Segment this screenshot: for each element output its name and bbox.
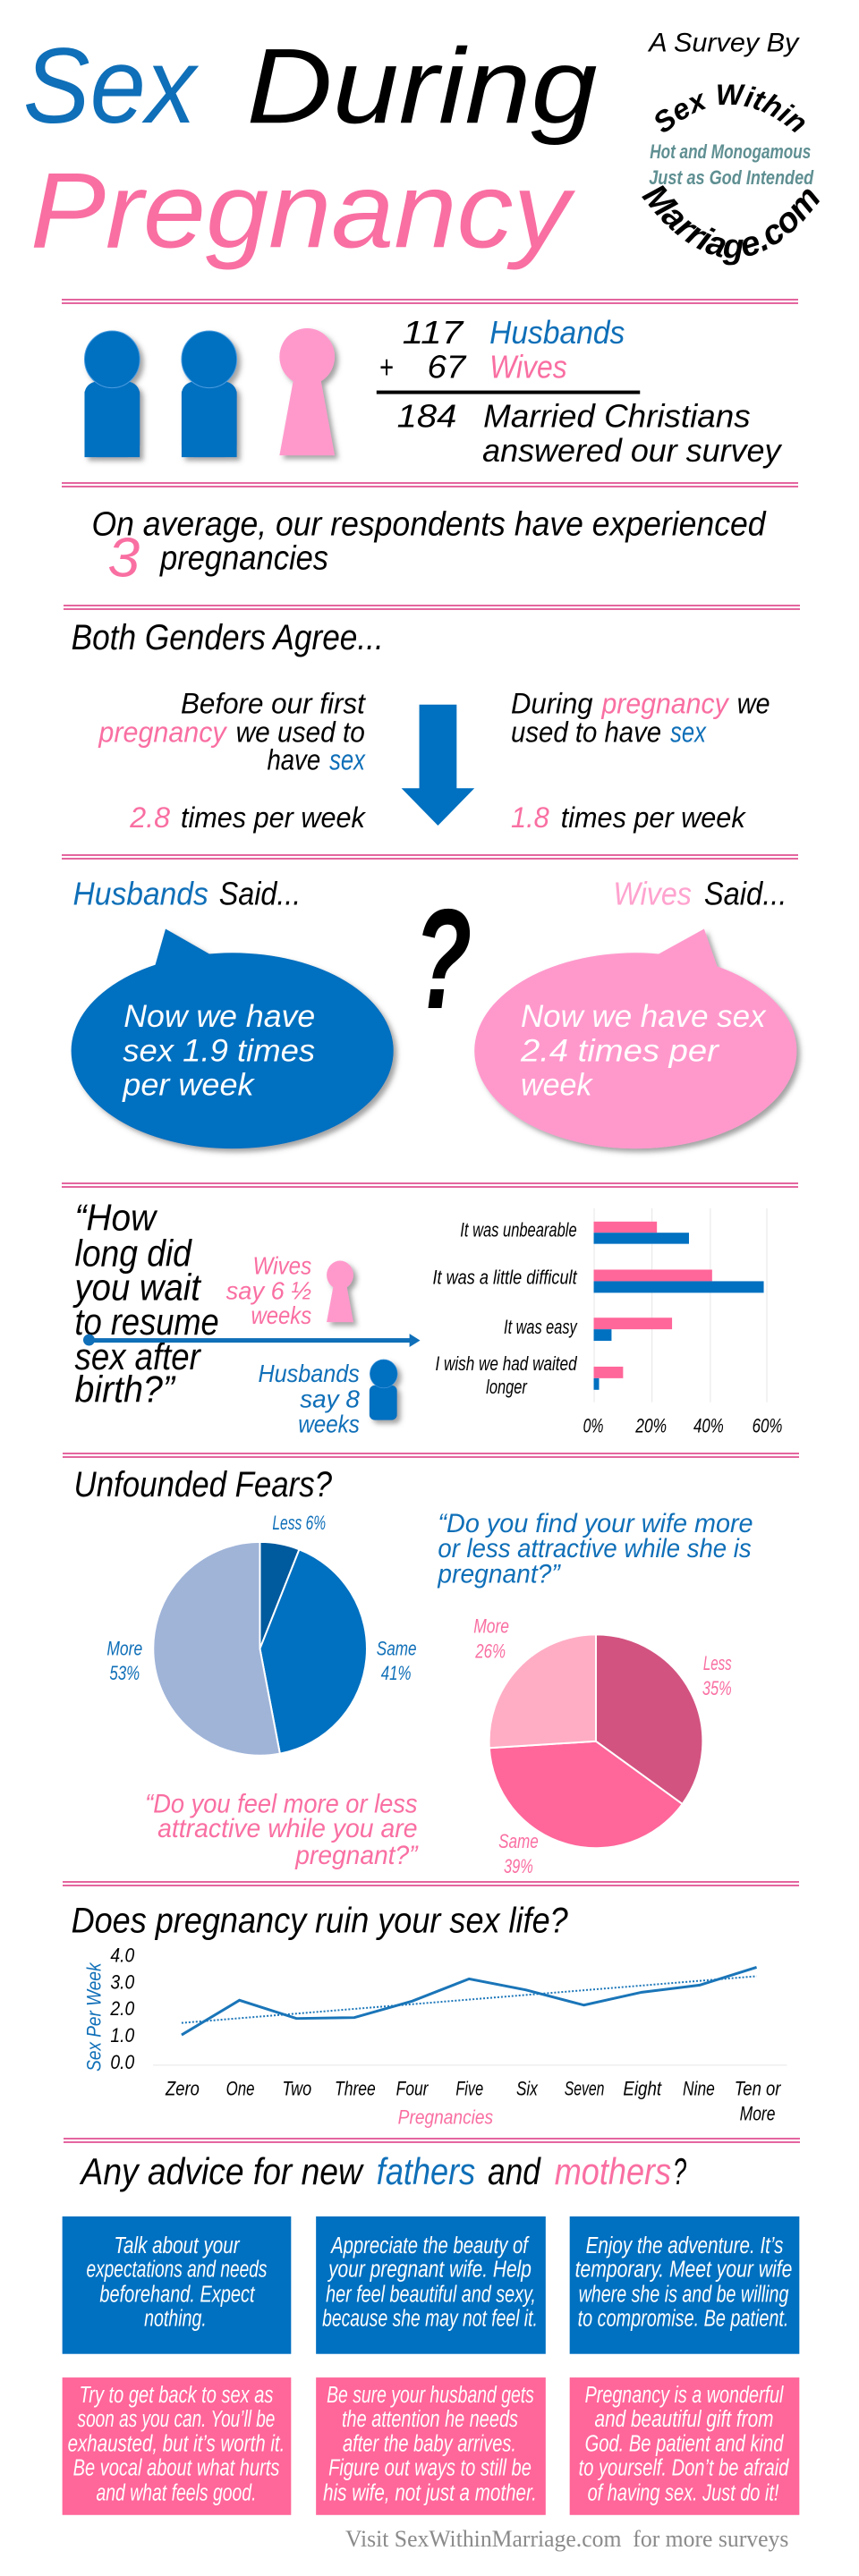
advice card: mother 1 <box>63 2377 291 2515</box>
heading: does pregnancy ruin: Does pregnancy ruin your sex life? <box>72 1902 568 1941</box>
bar chart: resuming sex <box>432 1208 782 1437</box>
text: husbands say <box>258 1360 360 1438</box>
quote: how long did you wait: to resume <box>75 1301 219 1343</box>
bar chart: resuming sex: 60% <box>753 1415 782 1437</box>
average pregnancies text: On average, our respondents have experienced <box>91 506 767 544</box>
pie labels: wives: More <box>106 1637 142 1659</box>
advice card: father 3 <box>570 2216 799 2354</box>
advice card: father 1: Talk about your <box>114 2233 241 2258</box>
panel: header and respondents <box>23 27 820 469</box>
quote: how long did you wait: sex after <box>75 1335 202 1377</box>
respondent tally: 67 <box>428 350 468 386</box>
text: during pregnancy: 1.8 <box>511 801 549 834</box>
quote: how long did you wait: you wait <box>72 1266 202 1308</box>
bar chart: resuming sex: It was unbearable <box>460 1219 577 1241</box>
respondent tally: Husbands <box>489 315 625 351</box>
icon: husband small <box>370 1360 397 1420</box>
line chart: sex per week by pregnancies: Seven <box>565 2078 604 2100</box>
heading: husbands said <box>73 877 301 912</box>
line chart: sex per week by pregnancies: One <box>226 2078 255 2100</box>
icon: husband 2 <box>182 331 237 457</box>
line chart: sex per week by pregnancies: Three <box>335 2078 376 2100</box>
heading: any advice: Any advice for new <box>79 2150 364 2192</box>
advice card: mother 1: Try to get back to sex as <box>80 2383 273 2408</box>
speech bubble: husbands: sex 1.9 times <box>123 1034 315 1069</box>
line chart: sex per week by pregnancies: 4.0 <box>110 1945 134 1967</box>
advice card: father 3: to compromise. Be patient. <box>578 2306 788 2331</box>
pie labels: wives: Less 6% <box>272 1512 326 1534</box>
speech bubble: wives: week <box>521 1067 593 1102</box>
advice card: father 3: temporary. Meet your wife <box>575 2258 792 2283</box>
icon: husband 1 <box>85 331 140 457</box>
text: husbands say: Husbands <box>258 1360 360 1387</box>
heading: wives said: Wives <box>613 877 692 912</box>
speech bubble: husbands <box>72 928 394 1148</box>
advice card: mother 3 <box>570 2377 799 2515</box>
logo: survey by Sex Within Marriage: A Survey By <box>647 29 800 58</box>
advice card: mother 3: and beautiful gift from <box>595 2407 773 2432</box>
quote: how long did you wait <box>72 1197 219 1411</box>
pie labels: wives: Same <box>377 1637 417 1659</box>
pie labels: wives: 41% <box>381 1662 412 1684</box>
text: during pregnancy: we <box>737 687 770 720</box>
bar chart: resuming sex: 40% <box>693 1415 724 1437</box>
advice card: mother 3: God. Be patient and kind <box>585 2432 785 2457</box>
quote: husbands attractive: or less attractive while she is <box>438 1534 752 1563</box>
respondent tally: Wives <box>489 350 567 386</box>
average pregnancies text: 3 <box>107 527 140 589</box>
advice card: mother 2: after the baby arrives. <box>343 2432 516 2457</box>
advice card: mother 1: Be vocal about what hurts <box>73 2456 279 2481</box>
quote: how long did you wait: “How <box>75 1197 158 1239</box>
line chart: sex per week by pregnancies: Pregnancies <box>398 2106 493 2129</box>
question mark: ? <box>414 879 472 1038</box>
text: during pregnancy <box>511 687 770 834</box>
panel: line chart and advice <box>63 1902 799 2552</box>
line chart: sex per week by pregnancies: Two <box>282 2078 311 2100</box>
bar chart: resuming sex: 20% <box>634 1415 667 1437</box>
heading: any advice: mothers <box>555 2150 671 2192</box>
pie labels: husbands: 35% <box>702 1677 732 1699</box>
icon: wife <box>279 328 335 455</box>
quote: wives attractive <box>145 1789 420 1870</box>
quote: husbands attractive: “Do you find your wife more <box>438 1509 753 1538</box>
heading: unfounded fears: Unfounded Fears? <box>74 1465 333 1504</box>
quote: how long did you wait: birth?” <box>75 1368 176 1411</box>
text: during pregnancy: sex <box>670 716 707 749</box>
average pregnancies text: pregnancies <box>159 539 328 578</box>
line chart: sex per week by pregnancies: Five <box>455 2078 483 2100</box>
logo: survey by Sex Within Marriage: Marriage.com <box>642 185 820 265</box>
advice card: mother 1: and what feels good. <box>96 2480 257 2505</box>
advice card: father 1: beforehand. Expect <box>99 2283 256 2308</box>
quote: wives attractive: attractive while you are <box>157 1814 418 1843</box>
heading: husbands said: Husbands <box>73 877 208 912</box>
text: before first pregnancy: times per week <box>181 801 366 834</box>
text: before first pregnancy: we used to <box>236 716 365 749</box>
heading: wives said <box>613 877 787 912</box>
logo: survey by Sex Within Marriage: Sex Within <box>655 84 805 132</box>
line chart: sex per week by pregnancies: Sex Per Week <box>82 1962 105 2072</box>
logo: survey by Sex Within Marriage: Just as God Intended <box>649 166 814 189</box>
line chart: sex per week by pregnancies: Four <box>396 2078 430 2100</box>
line chart: sex per week by pregnancies: Zero <box>165 2078 200 2100</box>
advice card: mother 3: to yourself. Don’t be afraid <box>579 2456 790 2481</box>
quote: wives attractive: pregnant?” <box>294 1841 420 1870</box>
text: wives say: weeks <box>251 1301 311 1329</box>
line chart: sex per week by pregnancies: 2.0 <box>109 1997 134 2020</box>
heading: any advice <box>79 2150 686 2192</box>
panel: resume timeline and fears <box>72 1197 782 1877</box>
title: Sex <box>23 27 200 146</box>
speech bubble: wives: 2.4 times per <box>520 1034 719 1069</box>
advice card: father 2: Appreciate the beauty of <box>329 2233 530 2258</box>
line chart: sex per week by pregnancies: 0.0 <box>110 2051 134 2073</box>
speech bubble: wives <box>474 928 796 1148</box>
advice card: father 1: expectations and needs <box>86 2258 267 2283</box>
advice card: mother 2: Be sure your husband gets <box>327 2383 534 2408</box>
text: during pregnancy: times per week <box>561 801 746 834</box>
advice card: mother 3: Pregnancy is a wonderful <box>585 2383 784 2408</box>
quote: husbands attractive: pregnant?” <box>437 1560 562 1589</box>
quote: wives attractive: “Do you feel more or less <box>145 1789 418 1818</box>
pie labels: husbands: Less <box>703 1652 732 1674</box>
respondent tally: Married Christians <box>483 398 751 434</box>
respondent tally: answered our survey <box>482 433 783 469</box>
bar chart: resuming sex: It was easy <box>504 1316 578 1338</box>
heading: any advice: ? <box>673 2150 686 2192</box>
advice card: father 1: nothing. <box>144 2306 207 2331</box>
pie labels: husbands <box>473 1614 732 1877</box>
text: during pregnancy: pregnancy <box>601 687 730 720</box>
heading: husbands said: Said... <box>219 877 301 912</box>
text: husbands say: weeks <box>298 1411 360 1438</box>
text: before first pregnancy: sex <box>329 742 366 775</box>
speech bubble: wives: Now we have sex <box>521 999 767 1034</box>
advice card: father 2: her feel beautiful and sexy, <box>326 2283 536 2308</box>
text: wives say <box>226 1251 311 1329</box>
text: before first pregnancy <box>98 687 367 834</box>
advice card: mother 2 <box>316 2377 546 2515</box>
pie chart: wives feel <box>153 1542 367 1756</box>
quote: husbands attractive <box>437 1509 753 1589</box>
line chart: sex per week by pregnancies: Ten or <box>735 2078 782 2100</box>
respondent tally: 184 <box>397 398 456 434</box>
text: before first pregnancy: have <box>267 742 320 775</box>
text: during pregnancy: used to have <box>511 716 661 749</box>
arrow: down <box>402 705 474 826</box>
respondent tally: + <box>379 350 394 386</box>
bar chart: resuming sex: longer <box>486 1376 528 1398</box>
pie chart: husbands find <box>489 1634 702 1848</box>
line chart: sex per week by pregnancies: Eight <box>623 2078 662 2100</box>
line chart: sex per week by pregnancies: Nine <box>683 2078 715 2100</box>
advice card: father 3: where she is and be willing <box>579 2283 789 2308</box>
advice card: father 2 <box>316 2216 546 2354</box>
title: During <box>247 27 598 146</box>
respondent tally: 117 <box>403 315 465 351</box>
line chart: sex per week by pregnancies: 1.0 <box>110 2024 134 2046</box>
heading: wives said: Said... <box>704 877 787 912</box>
advice card: father 1 <box>63 2216 291 2354</box>
panel: averages and speech bubbles <box>72 506 796 1148</box>
advice card: mother 2: his wife, not just a mother. <box>323 2480 537 2505</box>
arrow: timeline <box>83 1334 421 1347</box>
heading: any advice: fathers <box>377 2150 475 2192</box>
text: husbands say: say 8 <box>300 1385 360 1413</box>
icon: wife small <box>327 1261 353 1322</box>
advice card: mother 3: of having sex. Just do it! <box>588 2480 778 2505</box>
heading: any advice: and <box>488 2150 541 2192</box>
title <box>23 27 598 270</box>
advice card: mother 1: soon as you can. You’ll be <box>78 2407 275 2432</box>
quote: how long did you wait: long did <box>75 1233 192 1275</box>
line chart: sex per week by pregnancies: More <box>740 2103 775 2125</box>
text: wives say: Wives <box>253 1251 311 1279</box>
speech bubble: husbands: per week <box>122 1067 255 1102</box>
advice card: father 2: your pregnant wife. Help <box>327 2258 532 2283</box>
text: during pregnancy: During <box>511 687 593 720</box>
advice card: mother 2: the attention he needs <box>342 2407 518 2432</box>
text: before first pregnancy: pregnancy <box>98 716 228 749</box>
advice card: father 2: because she may not feel it. <box>322 2306 538 2331</box>
pie labels: husbands: More <box>473 1614 509 1637</box>
advice card: father 3: Enjoy the adventure. It’s <box>586 2233 783 2258</box>
respondent tally <box>377 315 783 469</box>
average pregnancies text <box>91 506 767 589</box>
footer: Visit SexWithinMarriage.com for more surveys <box>345 2525 788 2552</box>
speech bubble: husbands: Now we have <box>123 999 315 1034</box>
text: wives say: say 6 ½ <box>226 1276 311 1304</box>
advice card: mother 2: Figure out ways to still be <box>328 2456 532 2481</box>
title: Pregnancy <box>30 151 575 270</box>
heading: both genders agree: Both Genders Agree... <box>72 618 384 657</box>
line chart: sex per week by pregnancies: Six <box>516 2078 539 2100</box>
pie labels: husbands: Same <box>498 1830 539 1852</box>
pie labels: husbands: 26% <box>474 1640 506 1662</box>
pie labels: husbands: 39% <box>504 1855 533 1877</box>
line chart: sex per week by pregnancies: 3.0 <box>110 1970 134 1993</box>
advice card: mother 1: exhausted, but it’s worth it. <box>68 2432 285 2457</box>
text: before first pregnancy: 2.8 <box>129 801 171 834</box>
pie labels: wives: 53% <box>109 1662 140 1684</box>
bar chart: resuming sex: 0% <box>583 1415 603 1437</box>
bar chart: resuming sex: It was a little difficult <box>432 1266 577 1288</box>
bar chart: resuming sex: I wish we had waited <box>435 1352 577 1375</box>
text: before first pregnancy: Before our first <box>181 687 367 720</box>
pie labels: wives <box>106 1512 417 1684</box>
logo: survey by Sex Within Marriage: Hot and Monogamous <box>650 140 811 163</box>
line chart: sex per week by pregnancies <box>82 1945 787 2129</box>
logo: survey by Sex Within Marriage <box>642 29 820 265</box>
